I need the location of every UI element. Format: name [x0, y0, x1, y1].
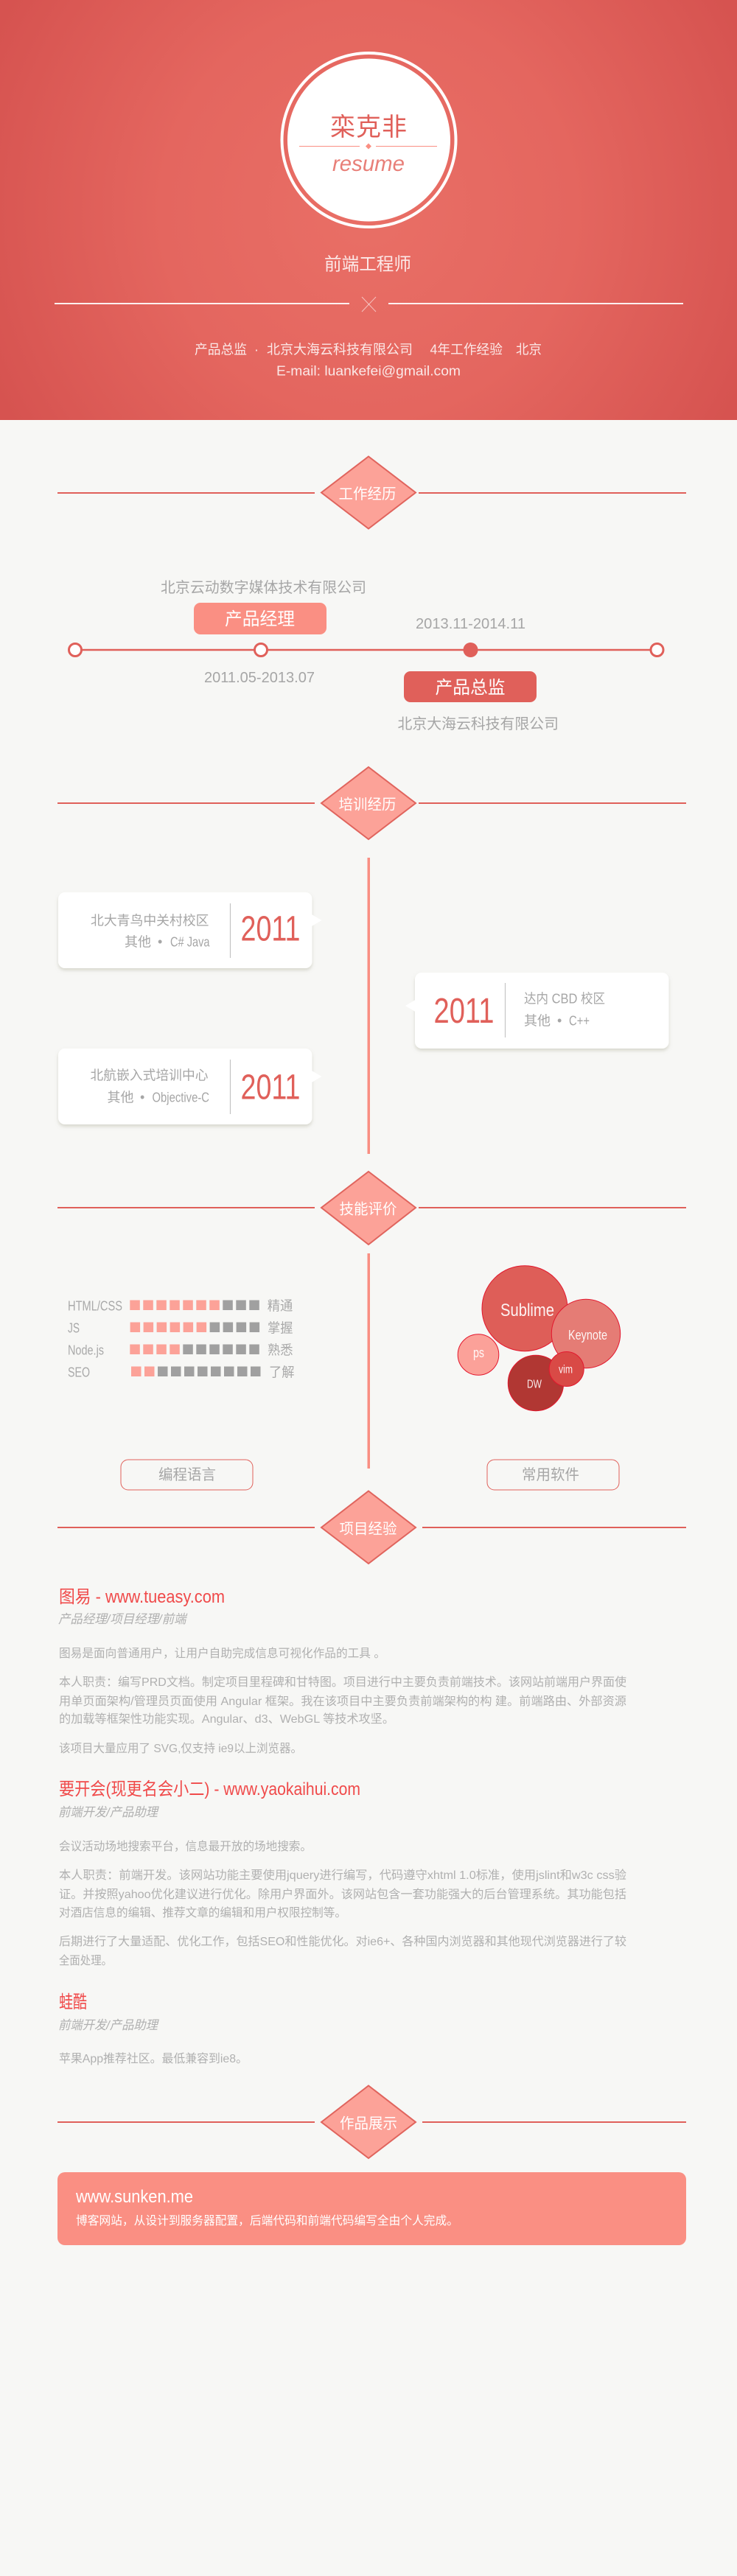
- bubble: DW: [508, 1355, 564, 1411]
- role pill 2: [404, 671, 537, 702]
- skills vertical line: [367, 1253, 370, 1469]
- project 1: [58, 1587, 626, 1755]
- training card 1: 其他: [125, 934, 151, 949]
- project role: 产品经理/项目经理/前端: [58, 1612, 188, 1626]
- training card 1: 北大青鸟中关村校区: [91, 914, 209, 928]
- training card 3: 其他: [108, 1091, 134, 1105]
- summary line: 产品总监: [195, 342, 247, 357]
- training card 2: C++: [569, 1014, 590, 1029]
- section heading: work: [57, 457, 686, 529]
- project title: 蛙酷: [59, 1992, 87, 2012]
- project text: 对酒店信息的编辑、推荐文章的编辑和用户权限控制等。: [59, 1906, 346, 1919]
- skill row: HTML/CSS: 精通: [268, 1298, 293, 1313]
- bubble: Sublime: Sublime: [500, 1301, 554, 1320]
- timeline node: [651, 644, 663, 656]
- project text: 用单页面架构/管理员页面使用 Angular 框架。我在该项目中主要负责前端架构的构 建。前端路由、外部资源: [59, 1695, 626, 1708]
- button: programming languages: [121, 1460, 253, 1490]
- section heading: projects: 项目经验: [339, 1521, 397, 1537]
- summary line: 北京: [516, 342, 542, 357]
- role pill 1: [194, 603, 326, 634]
- bubble: vim: [549, 1351, 584, 1387]
- timeline node active: [463, 643, 478, 657]
- section heading: work: 工作经历: [339, 486, 397, 503]
- section heading: skills: 技能评价: [339, 1201, 397, 1217]
- job title: 前端工程师: [324, 255, 411, 274]
- skill row: JS: JS: [68, 1320, 80, 1335]
- dates 2: 2013.11-2014.11: [416, 616, 525, 632]
- project 3: [58, 1992, 248, 2065]
- training card 3: Objective-C: [152, 1091, 209, 1105]
- portfolio panel: [57, 2172, 686, 2245]
- bubble: DW: DW: [527, 1378, 542, 1391]
- project text: 会议活动场地搜索平台，信息最开放的场地搜索。: [59, 1840, 312, 1853]
- project text: [59, 1647, 626, 1755]
- training card 1: C# Java: [170, 934, 210, 949]
- project role: 前端开发/产品助理: [58, 1805, 159, 1819]
- training card 3: 北航嵌入式培训中心: [90, 1068, 208, 1083]
- header banner: [0, 0, 737, 420]
- section heading: works: 作品展示: [340, 2115, 397, 2132]
- training card 3: [58, 1049, 321, 1124]
- skill row: Node.js: Node.js: [68, 1343, 104, 1357]
- training card 1: [58, 892, 321, 968]
- button: software: 常用软件: [522, 1466, 579, 1483]
- section heading: works: [57, 2085, 686, 2158]
- summary line: [195, 342, 542, 357]
- role pill 2: 产品总监: [435, 678, 506, 698]
- skill row: JS: 掌握: [268, 1320, 293, 1335]
- bubble: Keynote: [551, 1299, 621, 1368]
- training card 2: 其他: [524, 1014, 551, 1029]
- project text: 的加载等框架性功能实现。Angular、d3、WebGL 等技术攻坚。: [59, 1712, 394, 1726]
- project text: 本人职责：编写PRD文档。制定项目里程碑和甘特图。项目进行中主要负责前端技术。该网站前端用户界面使: [59, 1676, 626, 1689]
- summary line: 4年工作经验: [430, 342, 503, 357]
- company 2: 北京大海云科技有限公司: [398, 715, 559, 732]
- project text: [59, 1840, 626, 1967]
- project title: 图易 - www.tueasy.com: [59, 1587, 225, 1607]
- avatar badge: [282, 53, 455, 227]
- button: programming languages: 编程语言: [158, 1466, 216, 1483]
- project text: 后期进行了大量适配、优化工作，包括SEO和性能优化。对ie6+、各种国内浏览器和其他现代浏览器进行了较: [59, 1935, 626, 1948]
- portfolio description: 博客网站，从设计到服务器配置，后端代码和前端代码编写全由个人完成。: [76, 2214, 458, 2227]
- timeline node: [69, 644, 81, 656]
- portfolio url: www.sunken.me: [75, 2187, 193, 2207]
- skill row: HTML/CSS: HTML/CSS: [68, 1298, 122, 1313]
- role pill 1: 产品经理: [225, 609, 295, 629]
- section heading: skills: [57, 1172, 686, 1245]
- bubble: Keynote: Keynote: [568, 1328, 607, 1343]
- training card 2: 达内 CBD 校区: [524, 992, 605, 1007]
- training card 1: 2011: [240, 909, 301, 949]
- training card 1: •: [158, 934, 162, 949]
- skill row: SEO: 了解: [269, 1365, 295, 1379]
- training card 2: [405, 973, 669, 1049]
- project role: 前端开发/产品助理: [58, 2018, 159, 2032]
- bubble: vim: vim: [559, 1363, 573, 1376]
- summary line: ·: [254, 342, 259, 357]
- bubble: Sublime: [482, 1266, 567, 1351]
- training card 2: •: [557, 1013, 562, 1028]
- button: software: [487, 1460, 619, 1490]
- skill row: JS: [68, 1320, 293, 1335]
- company 1: 北京云动数字媒体技术有限公司: [161, 579, 366, 596]
- project text: 图易是面向普通用户，让用户自助完成信息可视化作品的工具 。: [59, 1647, 385, 1660]
- project text: 全面处理。: [59, 1954, 112, 1967]
- skill row: SEO: [68, 1365, 295, 1379]
- skill bars: programming languages: [68, 1298, 295, 1379]
- project text: 证。并按照yahoo优化建议进行优化。除用户界面外。该网站包含一套功能强大的后台管理系统。其功能包括: [59, 1888, 626, 1901]
- project text: 本人职责：前端开发。该网站功能主要使用jquery进行编写，代码遵守xhtml 1.0标准，使用jslint和w3c css验: [59, 1868, 626, 1882]
- dates 1: 2011.05-2013.07: [204, 670, 315, 686]
- skill row: HTML/CSS: [68, 1298, 293, 1313]
- name: 栾克非: [330, 113, 407, 141]
- skill row: Node.js: [68, 1343, 293, 1357]
- training vertical line: [367, 858, 370, 1154]
- software bubble chart: [458, 1266, 621, 1411]
- section heading: projects: [57, 1491, 686, 1564]
- bubble: ps: [458, 1334, 499, 1375]
- skill row: SEO: SEO: [68, 1365, 90, 1379]
- bubble: ps: ps: [473, 1345, 484, 1360]
- email: E-mail: luankefei@gmail.com: [276, 364, 461, 379]
- timeline node: [255, 644, 267, 656]
- summary line: 北京大海云科技有限公司: [267, 342, 413, 357]
- section heading: training: 培训经历: [339, 796, 397, 813]
- project text: 该项目大量应用了 SVG,仅支持 ie9以上浏览器。: [59, 1741, 302, 1755]
- section heading: training: [57, 767, 686, 839]
- project 2: [58, 1779, 626, 1967]
- work timeline: [69, 579, 663, 732]
- resume label: resume: [332, 152, 405, 176]
- project title: 要开会(现更名会小二) - www.yaokaihui.com: [59, 1779, 360, 1799]
- training card 3: 2011: [240, 1068, 301, 1107]
- header divider: [55, 297, 683, 312]
- project text: 苹果App推荐社区。最低兼容到ie8。: [59, 2052, 248, 2065]
- training card 2: 2011: [433, 992, 494, 1031]
- training card 3: •: [140, 1090, 144, 1105]
- skill row: Node.js: 熟悉: [268, 1343, 293, 1357]
